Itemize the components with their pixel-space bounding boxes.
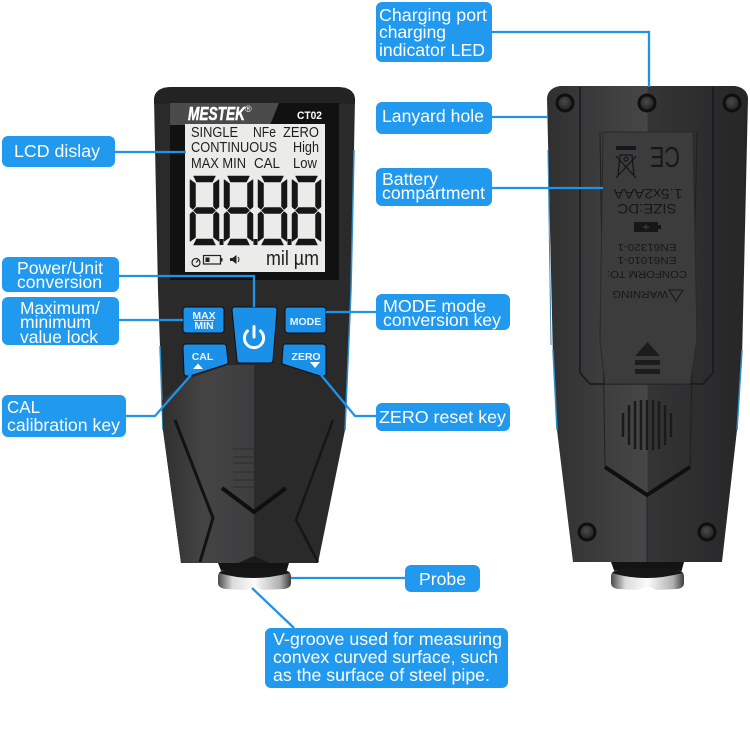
callout: MODE key: MODE mode: [383, 296, 486, 316]
callout: V-groove: as the surface of steel pipe.: [273, 665, 490, 685]
icon: recycling bin: [616, 146, 636, 178]
conformity text: EN61010-1: [617, 254, 676, 265]
LCD status text: CONTINUOUS: [191, 140, 277, 156]
icon: power symbol: [244, 326, 264, 348]
callout: max min key: [2, 297, 119, 347]
LCD status text: [191, 125, 319, 172]
arrow: ZERO key: [321, 375, 376, 416]
conformity text: CONFORM TO:: [607, 268, 687, 280]
button: MAX MIN: MIN: [194, 320, 214, 332]
arrow: LCD display: [115, 151, 186, 153]
back cover seams: [580, 87, 713, 562]
callout: LCD display: LCD dislay: [14, 141, 100, 161]
LCD status text: MAX MIN: [191, 156, 246, 172]
LCD status text: ZERO: [283, 125, 319, 141]
callout: probe: Probe: [419, 569, 466, 589]
icon: battery polarity: [634, 222, 661, 232]
callout: MODE key: [376, 294, 510, 330]
LCD status text: High: [293, 140, 319, 156]
icon: CE mark: CE: [650, 140, 680, 172]
LCD screen: [185, 124, 325, 272]
conformity text: EN61320-1: [617, 241, 676, 252]
back body: [547, 86, 748, 562]
callout: V-groove: convex curved surface, such: [273, 647, 498, 667]
back probe: [611, 562, 684, 590]
icon: eject arrow: [635, 342, 660, 374]
button: MAX MIN: MAX: [192, 310, 216, 322]
callout: ZERO key: [376, 403, 510, 431]
callout: charging port: indicator LED: [379, 40, 485, 60]
battery size text: [613, 186, 682, 217]
callout: max min key: value lock: [20, 327, 98, 347]
arrow: power key: [119, 276, 254, 307]
registered mark: ®: [245, 104, 252, 114]
battery size text: SIZE:DC: [618, 201, 676, 217]
button: MODE: [285, 307, 326, 333]
seven-segment digits: [190, 176, 321, 245]
arrow: CAL key: [126, 375, 191, 416]
callout: power key: Power/Unit: [17, 258, 103, 278]
battery cover panel: [600, 132, 697, 384]
callout: ZERO key: ZERO reset key: [379, 407, 506, 427]
icon: timer: [192, 258, 200, 266]
callout: lanyard hole: Lanyard hole: [382, 106, 484, 126]
callout: charging port: Charging port: [379, 5, 487, 25]
callout: power key: [2, 257, 119, 292]
LCD status text: SINGLE: [191, 125, 238, 141]
battery size text: 1.5x2AAA: [613, 186, 682, 202]
icon: battery: [204, 256, 222, 264]
callout: charging port: charging: [379, 22, 446, 42]
callout: CAL key: calibration key: [7, 415, 120, 435]
callout: V-groove: [265, 628, 508, 688]
unit text: mil µm: [266, 248, 319, 270]
callout: CAL key: [2, 395, 126, 437]
arrow: probe: [291, 577, 405, 579]
callout: lanyard hole: [376, 102, 492, 134]
callout: V-groove: V-groove used for measuring: [273, 629, 502, 649]
front body: [154, 87, 355, 563]
callout: LCD display: [2, 136, 115, 167]
screws: [556, 94, 742, 542]
front probe: [218, 563, 291, 590]
front lower body left half: [162, 365, 254, 563]
callout: power key: conversion: [17, 272, 102, 292]
callout: MODE key: conversion key: [383, 310, 501, 330]
model number: CT02: [297, 110, 322, 122]
button: CAL: [183, 344, 228, 376]
button: MAX MIN: [183, 307, 224, 333]
callout: charging port: [376, 2, 492, 62]
speaker grill: [623, 400, 671, 450]
arrow: battery compartment: [492, 187, 603, 189]
brand logo: MESTEK: [188, 104, 247, 124]
front device: [154, 87, 355, 590]
LCD status text: Low: [293, 156, 317, 172]
button: MODE: MODE: [290, 316, 321, 328]
icon: speaker: [230, 255, 239, 264]
arrow: charging port: [492, 32, 649, 87]
back device: [547, 86, 748, 590]
callout: CAL key: CAL: [7, 397, 40, 417]
callout: battery compartment: Battery: [382, 169, 438, 189]
callout: max min key: minimum: [20, 312, 91, 332]
arrow: MODE key: [326, 311, 376, 313]
callout: probe: [405, 565, 480, 592]
conformity text: WARNING: [612, 288, 668, 300]
button: CAL: CAL: [192, 351, 214, 363]
screen bezel: [170, 103, 339, 280]
button: ZERO: [282, 344, 326, 376]
button: power: [232, 307, 277, 363]
front lower body creases: [175, 420, 333, 563]
arrow: V-groove: [252, 588, 294, 628]
conformity text: [607, 241, 687, 301]
callout: battery compartment: compartment: [382, 183, 485, 203]
LCD status text: CAL: [254, 156, 280, 172]
arrow: lanyard hole: [492, 116, 548, 118]
button: ZERO: ZERO: [291, 351, 321, 363]
callout: battery compartment: [376, 168, 492, 206]
callout: max min key: Maximum/: [20, 298, 100, 318]
LCD status text: NFe: [253, 125, 276, 141]
arrow: max min key: [119, 319, 183, 321]
